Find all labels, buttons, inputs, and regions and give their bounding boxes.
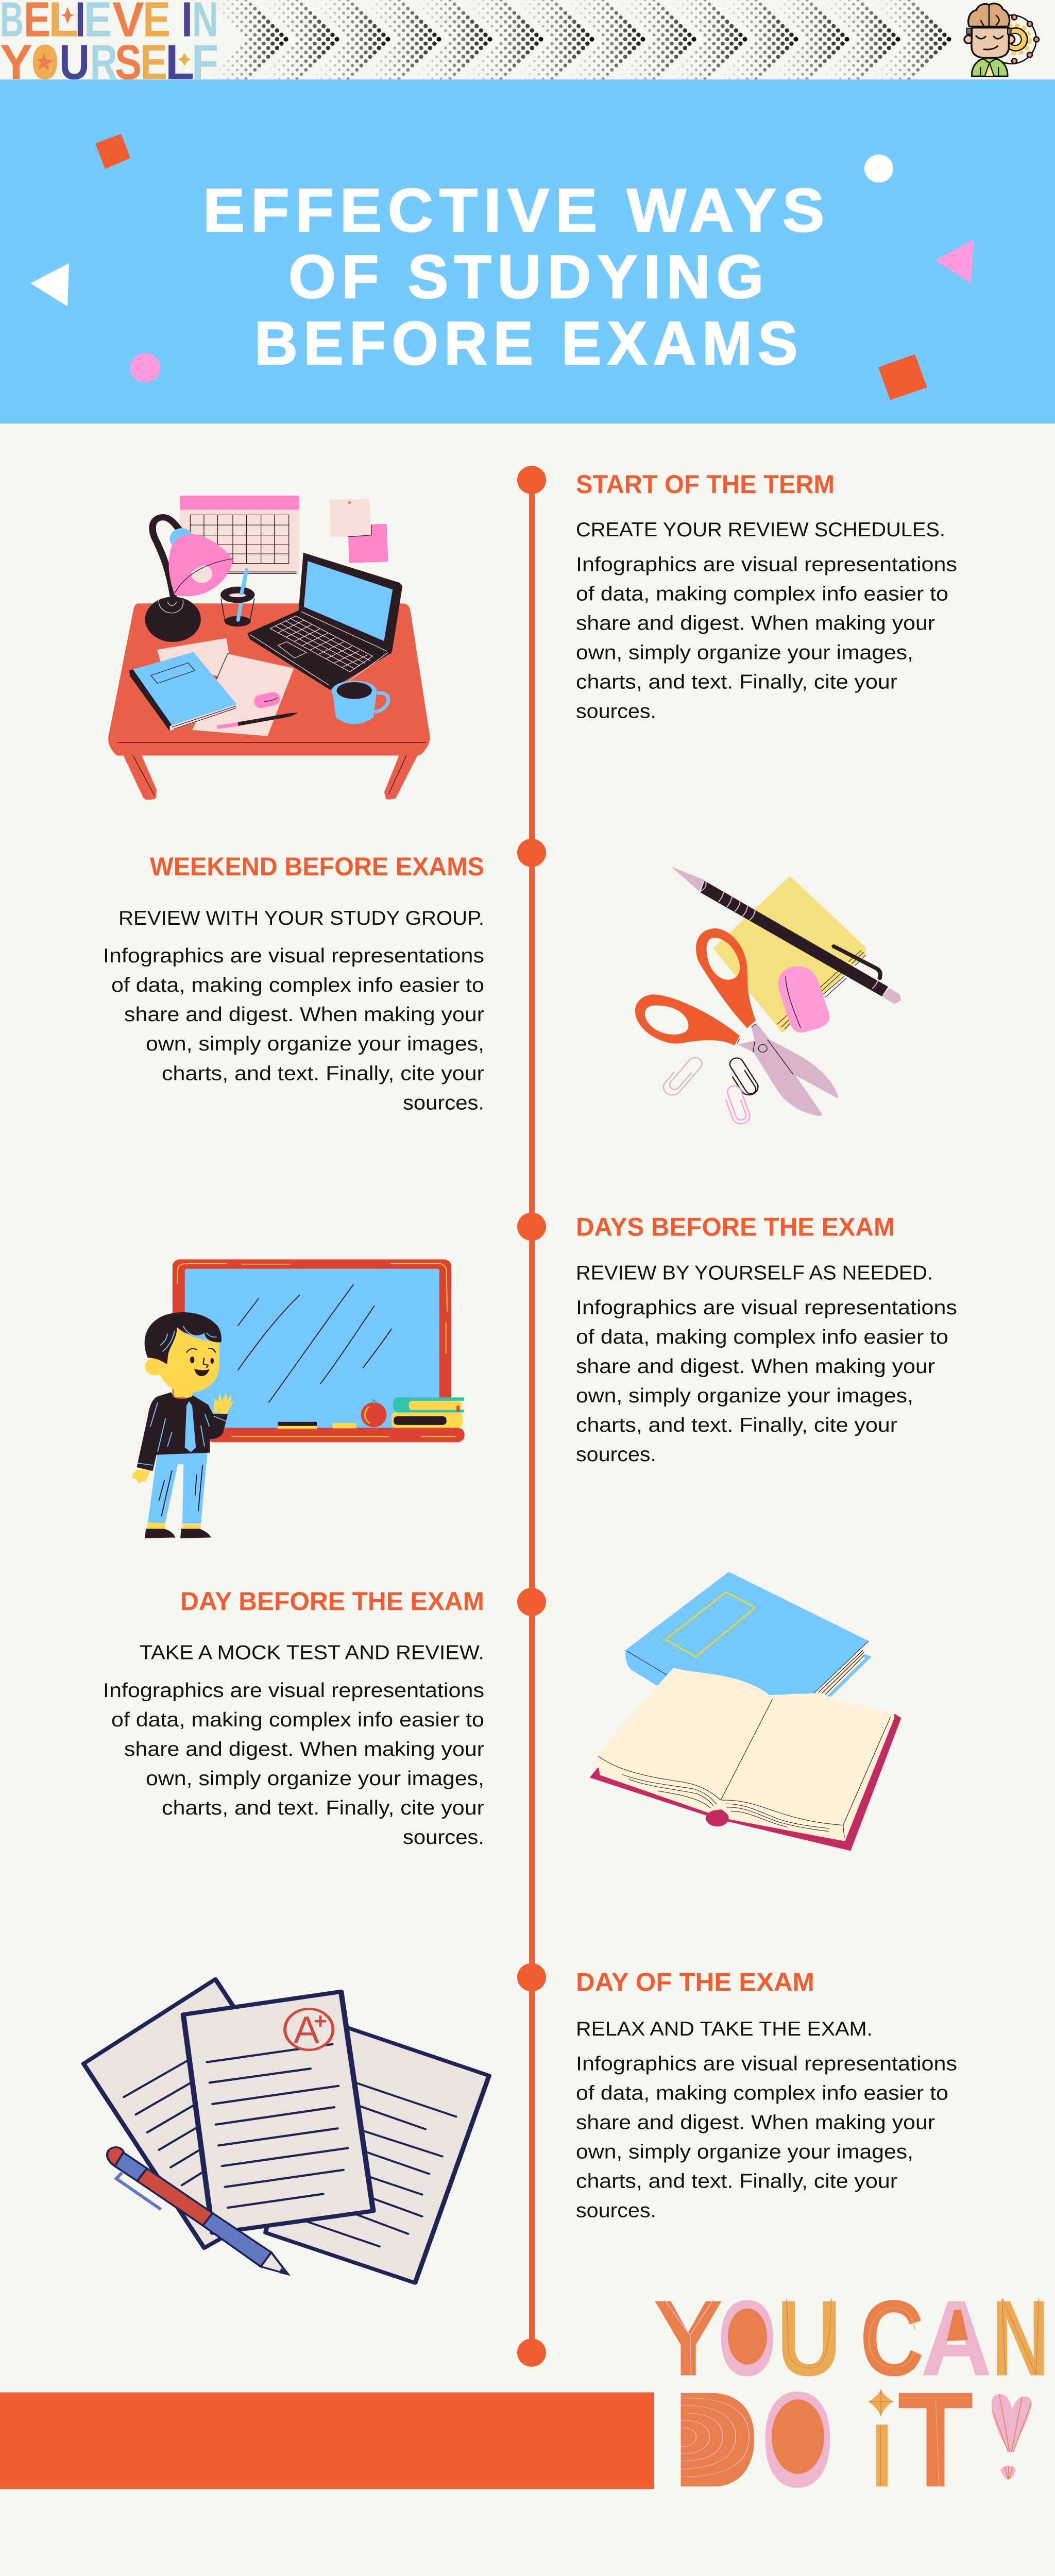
lettering: you can do it: O xyxy=(761,2363,834,2515)
chalk eraser and chalk xyxy=(278,1422,356,1429)
logo lettering: believe in yourself: F xyxy=(192,34,218,90)
section 2 text: weekend before exams: Infographics are visual representations xyxy=(103,945,484,967)
section 1 text: start of the term: own, simply organize your images, xyxy=(576,641,913,664)
section 4 text: day before the exam: DAY BEFORE THE EXAM xyxy=(180,1587,484,1616)
section 5 text: day of the exam: RELAX AND TAKE THE EXAM. xyxy=(576,2018,873,2040)
grade stamp xyxy=(285,2009,333,2052)
shape: white triangle xyxy=(30,263,69,307)
section 3 text: days before the exam: DAYS BEFORE THE EXAM xyxy=(576,1212,895,1241)
section 4 text: day before the exam: charts, and text. Finally, cite your xyxy=(162,1797,484,1819)
section 2 text: weekend before exams: charts, and text. Finally, cite your xyxy=(162,1062,484,1084)
table xyxy=(108,603,430,800)
lettering: you can do it: O xyxy=(718,2278,776,2398)
section 2 text: weekend before exams xyxy=(103,852,484,1114)
section 3 text: days before the exam: share and digest. When making your xyxy=(576,1355,935,1378)
section 5 text: day of the exam: own, simply organize your images, xyxy=(576,2141,913,2163)
closed blue book xyxy=(625,1572,872,1698)
section 5 text: day of the exam: Infographics are visual representations xyxy=(576,2053,957,2075)
section 5 text: day of the exam: charts, and text. Finally, cite your xyxy=(576,2170,897,2193)
logo lettering: believe in yourself: U xyxy=(59,34,90,90)
wall calendar xyxy=(180,496,299,574)
section 3 text: days before the exam: sources. xyxy=(576,1443,656,1466)
section 1 text: start of the term xyxy=(576,470,957,722)
section 3 text: days before the exam: Infographics are visual representations xyxy=(576,1296,957,1319)
pink eraser xyxy=(778,967,829,1032)
lettering: you can do it: D xyxy=(673,2363,759,2515)
pen xyxy=(107,2147,288,2275)
lettering: you can do it: I xyxy=(871,2363,893,2515)
section 2 text: weekend before exams: REVIEW WITH YOUR STUDY GROUP. xyxy=(118,907,484,929)
section 3 text: days before the exam: charts, and text. Finally, cite your xyxy=(576,1414,897,1436)
illustration: study desk xyxy=(108,496,430,800)
section 2 text: weekend before exams: sources. xyxy=(403,1092,484,1114)
section 4 text: day before the exam: TAKE A MOCK TEST AND REVIEW. xyxy=(140,1641,484,1664)
lettering: you can do it: C xyxy=(860,2278,924,2398)
section 1 text: start of the term: charts, and text. Finally, cite your xyxy=(576,671,897,693)
lettering: you can do it xyxy=(653,2278,1049,2515)
title: EFFECTIVE WAYS xyxy=(203,176,830,245)
footer orange bar xyxy=(0,2393,654,2489)
logo lettering: believe in yourself: L xyxy=(165,34,194,90)
lettering: you can do it: T xyxy=(897,2363,974,2515)
decorative inlays and heart exclamation xyxy=(664,2298,1039,2486)
sticky notes xyxy=(330,499,388,563)
grade stamp: + xyxy=(314,2009,327,2033)
eraser and pencil xyxy=(216,691,299,729)
section 3 text: days before the exam: own, simply organize your images, xyxy=(576,1384,913,1407)
section 4 text: day before the exam xyxy=(103,1587,484,1849)
section 4 text: day before the exam: of data, making complex info easier to xyxy=(111,1708,484,1731)
logo lettering: believe in yourself xyxy=(0,0,218,90)
blackboard xyxy=(173,1259,465,1442)
logo lettering: believe in yourself: E xyxy=(140,34,167,90)
section 1 text: start of the term: START OF THE TERM xyxy=(576,470,835,499)
title xyxy=(203,176,830,378)
notebook xyxy=(129,652,237,731)
logo lettering: believe in yourself: S xyxy=(115,34,142,90)
logo lettering: believe in yourself: R xyxy=(90,34,117,90)
logo lettering: believe in yourself: Y xyxy=(0,34,32,90)
shape: pink triangle xyxy=(935,240,974,283)
lettering: you can do it: A xyxy=(921,2278,992,2398)
lettering: you can do it: Y xyxy=(653,2278,723,2398)
header banner strip xyxy=(1,0,1040,79)
section 5 text: day of the exam: DAY OF THE EXAM xyxy=(576,1968,814,1996)
front sheet with lines xyxy=(183,1992,373,2233)
book stack xyxy=(392,1397,464,1428)
illustration: scissors, pencil, note and clips xyxy=(635,867,901,1126)
papers xyxy=(157,638,294,736)
shape: orange rhombus top left xyxy=(95,134,130,169)
section 4 text: day before the exam: sources. xyxy=(403,1826,484,1849)
desk lamp xyxy=(145,517,233,642)
section 1 text: start of the term: share and digest. When making your xyxy=(576,612,935,634)
section 4 text: day before the exam: Infographics are visual representations xyxy=(103,1679,484,1702)
section 5 text: day of the exam: share and digest. When making your xyxy=(576,2111,935,2134)
section 1 text: start of the term: Infographics are visual representations xyxy=(576,553,957,575)
halftone chevron pattern xyxy=(214,0,951,80)
logo lettering: believe in yourself: O xyxy=(31,34,59,90)
title: BEFORE EXAMS xyxy=(254,309,804,378)
pencil cup xyxy=(220,569,254,626)
back left sheet xyxy=(83,1979,341,2248)
open book xyxy=(590,1668,901,1851)
section 3 text: days before the exam: of data, making complex info easier to xyxy=(576,1326,948,1348)
mechanical pencil xyxy=(671,867,901,1004)
section 3 text: days before the exam: REVIEW BY YOURSELF AS NEEDED. xyxy=(576,1262,933,1284)
paper clips xyxy=(660,1053,761,1126)
section 4 text: day before the exam: own, simply organize your images, xyxy=(146,1767,484,1790)
section 1 text: start of the term: of data, making complex info easier to xyxy=(576,583,948,605)
section 1 text: start of the term: sources. xyxy=(576,700,656,722)
back right sheet xyxy=(266,2011,489,2283)
title: OF STUDYING xyxy=(288,242,770,311)
section 5 text: day of the exam: sources. xyxy=(576,2199,656,2222)
lettering: you can do it: U xyxy=(777,2278,841,2398)
scissors xyxy=(635,928,838,1116)
section 2 text: weekend before exams: share and digest. When making your xyxy=(124,1004,484,1026)
section 2 text: weekend before exams: of data, making complex info easier to xyxy=(111,974,484,996)
shape: orange rhombus bottom right xyxy=(878,354,927,400)
title banner xyxy=(0,79,1055,423)
apple xyxy=(361,1398,386,1427)
section 1 text: start of the term: CREATE YOUR REVIEW SCHEDULES. xyxy=(576,518,945,541)
section 3 text: days before the exam xyxy=(576,1212,957,1466)
section 4 text: day before the exam: share and digest. When making your xyxy=(124,1738,484,1760)
shape: pink circle xyxy=(130,353,160,382)
illustration: graded exam papers and pen xyxy=(83,1979,489,2283)
section 2 text: weekend before exams: WEEKEND BEFORE EXAMS xyxy=(150,852,484,881)
laptop xyxy=(247,553,402,690)
section 5 text: day of the exam: of data, making complex info easier to xyxy=(576,2082,948,2104)
timeline xyxy=(517,466,546,2367)
section 2 text: weekend before exams: own, simply organize your images, xyxy=(146,1033,484,1055)
shape: white circle xyxy=(864,155,893,182)
grade stamp: A xyxy=(294,2009,319,2052)
illustration: open book over closed book xyxy=(590,1572,901,1851)
teacher character xyxy=(132,1312,234,1538)
sticky pad xyxy=(713,876,866,1033)
section 5 text: day of the exam xyxy=(576,1968,957,2222)
icon: thinking man with brain and gear xyxy=(964,4,1039,76)
illustration: teacher at blackboard xyxy=(132,1259,465,1538)
coffee mug xyxy=(332,681,388,724)
